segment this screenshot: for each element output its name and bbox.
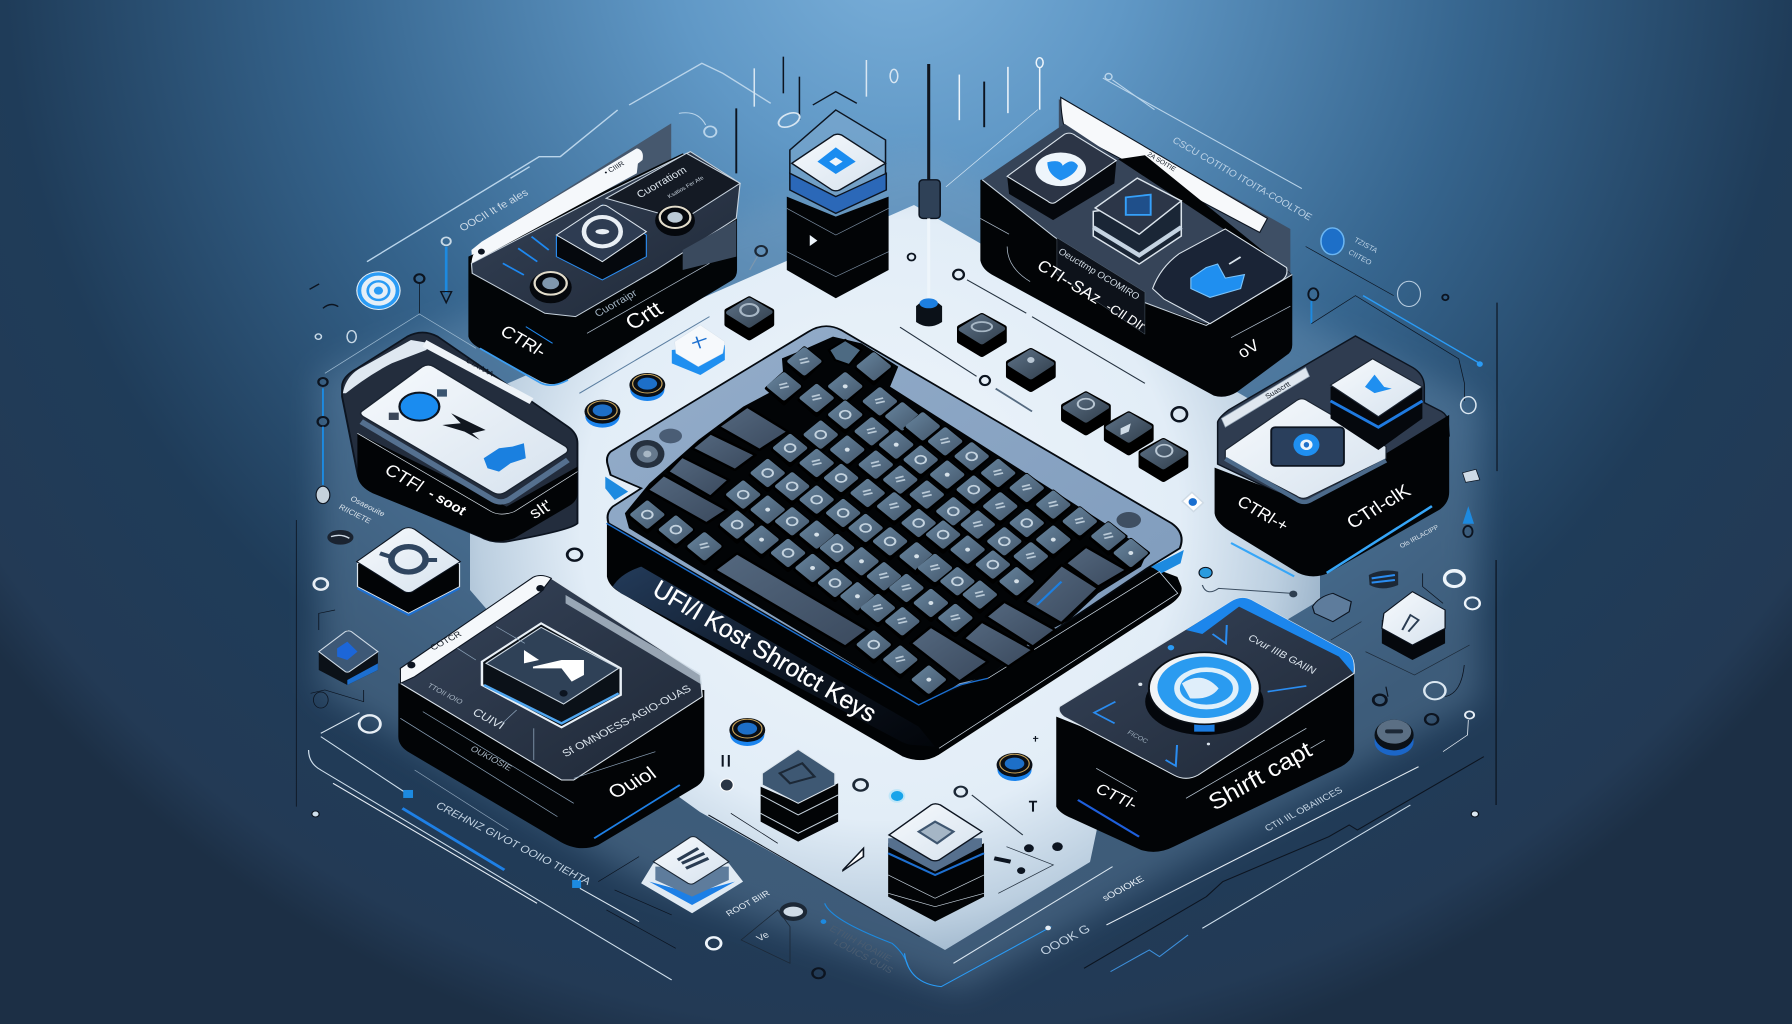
black front [357,433,577,541]
caption: top right [1170,135,1380,267]
top face [982,124,1292,324]
panel: right Ctrl-click: Suascrtt [1263,380,1292,401]
key stack: bottom centre [888,571,1445,922]
panel: top left Ctrl [457,123,740,385]
key [482,623,621,727]
small keys along keyboard [584,299,1185,781]
chip [1271,427,1344,466]
top face [400,576,702,780]
stacked key [1331,387,1422,450]
panel: right Ctrl-click: CTrl-clK [1343,481,1415,533]
labels: CTRl- [497,322,550,361]
round buttons [530,271,572,303]
hex white key [358,563,460,613]
body [1056,667,1354,852]
panel: keyboard [605,326,1184,760]
labels: Ouiol [604,764,661,803]
antenna [916,64,942,326]
body [468,153,737,384]
key 3 [1153,229,1287,324]
caption: bottom left: ROOT BIIR [724,888,772,918]
panel: bottom left: COTCR [428,629,464,652]
key 1 [1007,133,1116,220]
key well [625,337,1148,704]
panel: bottom right Shift: FICOC [1126,730,1149,745]
caption: top right: CSCU COTITIO ITOITA-COOLTOE [1170,135,1314,223]
panel: left Ctrl: RIICIETE [337,503,373,525]
lines on body [980,218,1290,338]
panel: left Ctrl [337,332,577,542]
panel: top left Ctrl: Crtt [621,297,668,335]
panel: bottom right Shift [1056,598,1354,852]
white strip [400,576,551,683]
caption: bottom left: Ve [755,930,772,944]
blue dashes [503,237,549,275]
mid-tone hexagon frame [319,150,1480,990]
light floor [470,205,1320,950]
panel: left Ctrl: Osaeouite [349,494,387,519]
dark blue key [319,630,378,685]
caption: bottom right: OOOK G [1037,922,1093,958]
labels: CTRl-+ [1234,492,1292,535]
panel: top left Ctrl: Ksatios Fer Afe [667,176,705,200]
caption: top right: CIITEO [1347,248,1374,267]
blue band [1186,598,1354,673]
caption: bottom left: LOUICS OUIS [831,937,895,976]
panel: top left Ctrl: Cuorraipr [593,287,640,320]
panel: bottom left: Sf OMNOESS-AGIO-OUAS [560,683,694,760]
panel: top left Ctrl: • CIIIR [603,160,626,177]
circuit lines: lower left [296,520,920,980]
blue base key [641,863,743,913]
panel: left Ctrl: - soot [425,487,469,519]
body [398,683,704,848]
title text: UFI/I Kost Shrotct Keys [648,575,881,728]
panel: top right: Oeucttmp OCOMIRO [1056,246,1141,302]
keyboard base [607,523,1182,760]
right mini keys [1312,593,1351,622]
lines [400,627,655,830]
white plate [1225,399,1386,498]
panel: top right [980,97,1292,397]
small white key [672,345,725,375]
panel: left Ctrl: sIt' [525,496,556,522]
plate details [630,440,664,468]
panel: bottom right Shift: CTTl- [1092,781,1141,813]
panel: top left Ctrl: Cuorratiom [635,164,689,201]
panel: bottom left [398,576,704,848]
icons [400,393,439,421]
keycaps [630,340,1148,697]
panel: bottom left: OUKIOSIE [469,744,514,773]
caption: bottom right: sOOIOKE [1100,874,1147,904]
panel: right Ctrl-click [1215,336,1449,576]
panel: top right: 2A SOITIE [1146,151,1177,173]
panel: top right: -CIl DIr [1103,299,1149,333]
key 2 stack [1093,201,1181,264]
title strip [613,567,935,747]
body [980,155,1292,397]
panel: bottom left: TTOII IOIO [426,681,465,706]
wide keys [647,407,1127,682]
circuit lines: right and bottom [900,58,1497,587]
bottom lip [480,348,568,385]
panel: top left Ctrl: OOCII It fe ales [457,187,531,234]
chevrons [1094,625,1306,766]
caption: bottom left: CREHNIZ GIVOT OOIIO TIEHTA [433,800,593,888]
keyboard top plate [607,326,1182,704]
panel: left Ctrl: CTA AAA [464,357,495,378]
circuit lines: top left [310,57,898,504]
top face [1059,598,1354,778]
caption: bottom right: CTII IIL OBAIIICES [1263,785,1345,834]
back window [480,123,671,263]
key stack: top [787,110,889,298]
caption: bottom left: ETIIIH HOAIIIE [827,924,894,964]
key [556,205,646,280]
panel: right Ctrl-click: Ols IRLACIPP [1399,524,1441,550]
black front [1215,415,1449,576]
labels: CTI--SAz [1034,256,1105,308]
icon: blue target [356,271,401,310]
panel: top right: oV [1234,336,1263,362]
caption: bottom right [1037,785,1345,958]
labels: CTFl [381,460,427,495]
frame [1218,336,1449,506]
frame [342,332,577,542]
top face [471,152,740,317]
panel: bottom left: CUIVI [470,706,507,732]
panel: bottom right Shift: Cvur IIIB GAIIN [1245,633,1318,677]
caption: top right: TZISTA [1352,235,1380,255]
key stack: bottom left small [313,528,838,913]
back window [1059,99,1290,275]
white top [361,365,568,494]
blue glow lines [1327,506,1432,573]
blue accent line [607,523,988,705]
dial [1145,668,1264,735]
caption: bottom left [433,800,895,976]
front details [1078,800,1139,837]
blue glow under plate [605,477,1184,573]
labels: Shirft capt [1202,738,1319,815]
